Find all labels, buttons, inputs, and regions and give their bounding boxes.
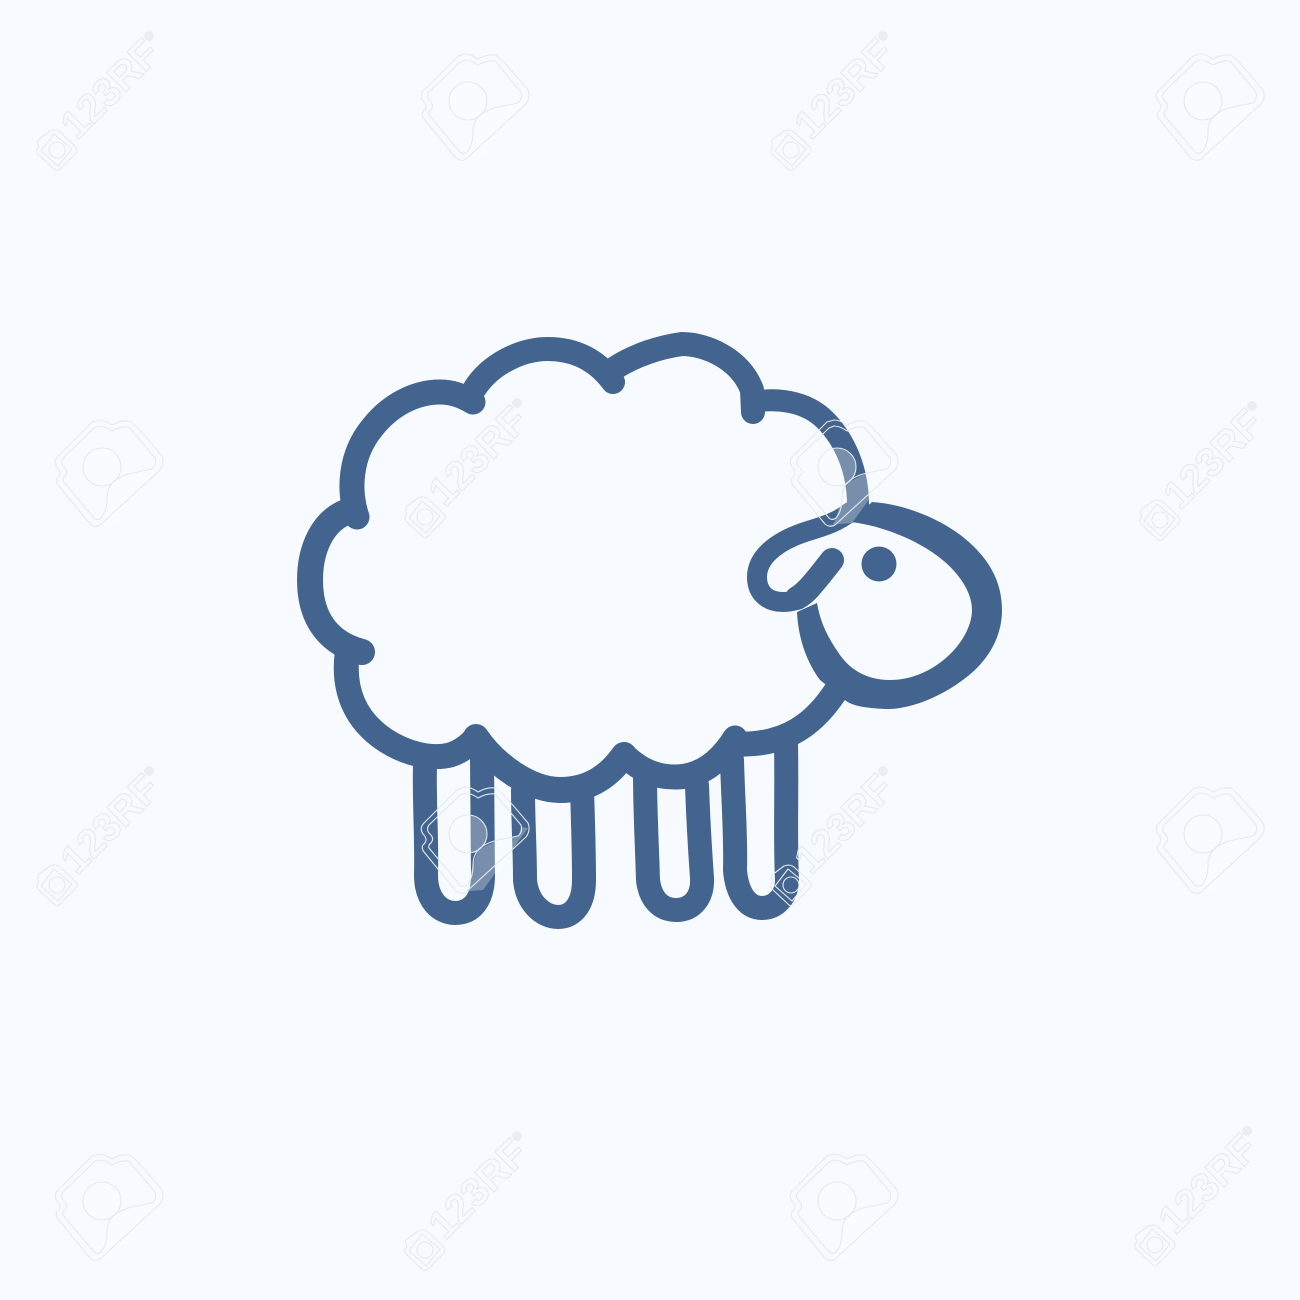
watermark stamp: 123RF [786,31,902,147]
sheep wool body outline [310,344,858,790]
watermark stamp: 123RF [420,398,536,514]
watermark icon [790,1154,898,1260]
watermark row 1 [37,31,1264,171]
watermark stamp: 123RF [786,766,902,882]
watermark icon [55,420,163,526]
watermark icon [55,1154,163,1260]
sheep head [797,502,1002,709]
watermark icon [1156,54,1264,160]
sheep ear [757,512,850,602]
watermark stamp: 123RF [52,31,168,147]
sheep legs [425,745,787,917]
watermark row 4 [55,1126,1266,1270]
watermark stamp: 123RF [1150,1126,1266,1242]
watermark stamp: 123RF [420,1131,536,1247]
watermark icon [421,787,529,893]
watermark row 3 [37,766,1264,906]
watermark icon [790,420,898,526]
watermark stamp: 123RF [52,766,168,882]
sheep illustration [310,344,1002,917]
sheep eye [862,546,896,582]
watermark stamp: 123RF [1155,401,1271,517]
watermark icon [1156,787,1264,893]
watermark icon [421,54,529,160]
watermark row 2 [55,398,1271,540]
